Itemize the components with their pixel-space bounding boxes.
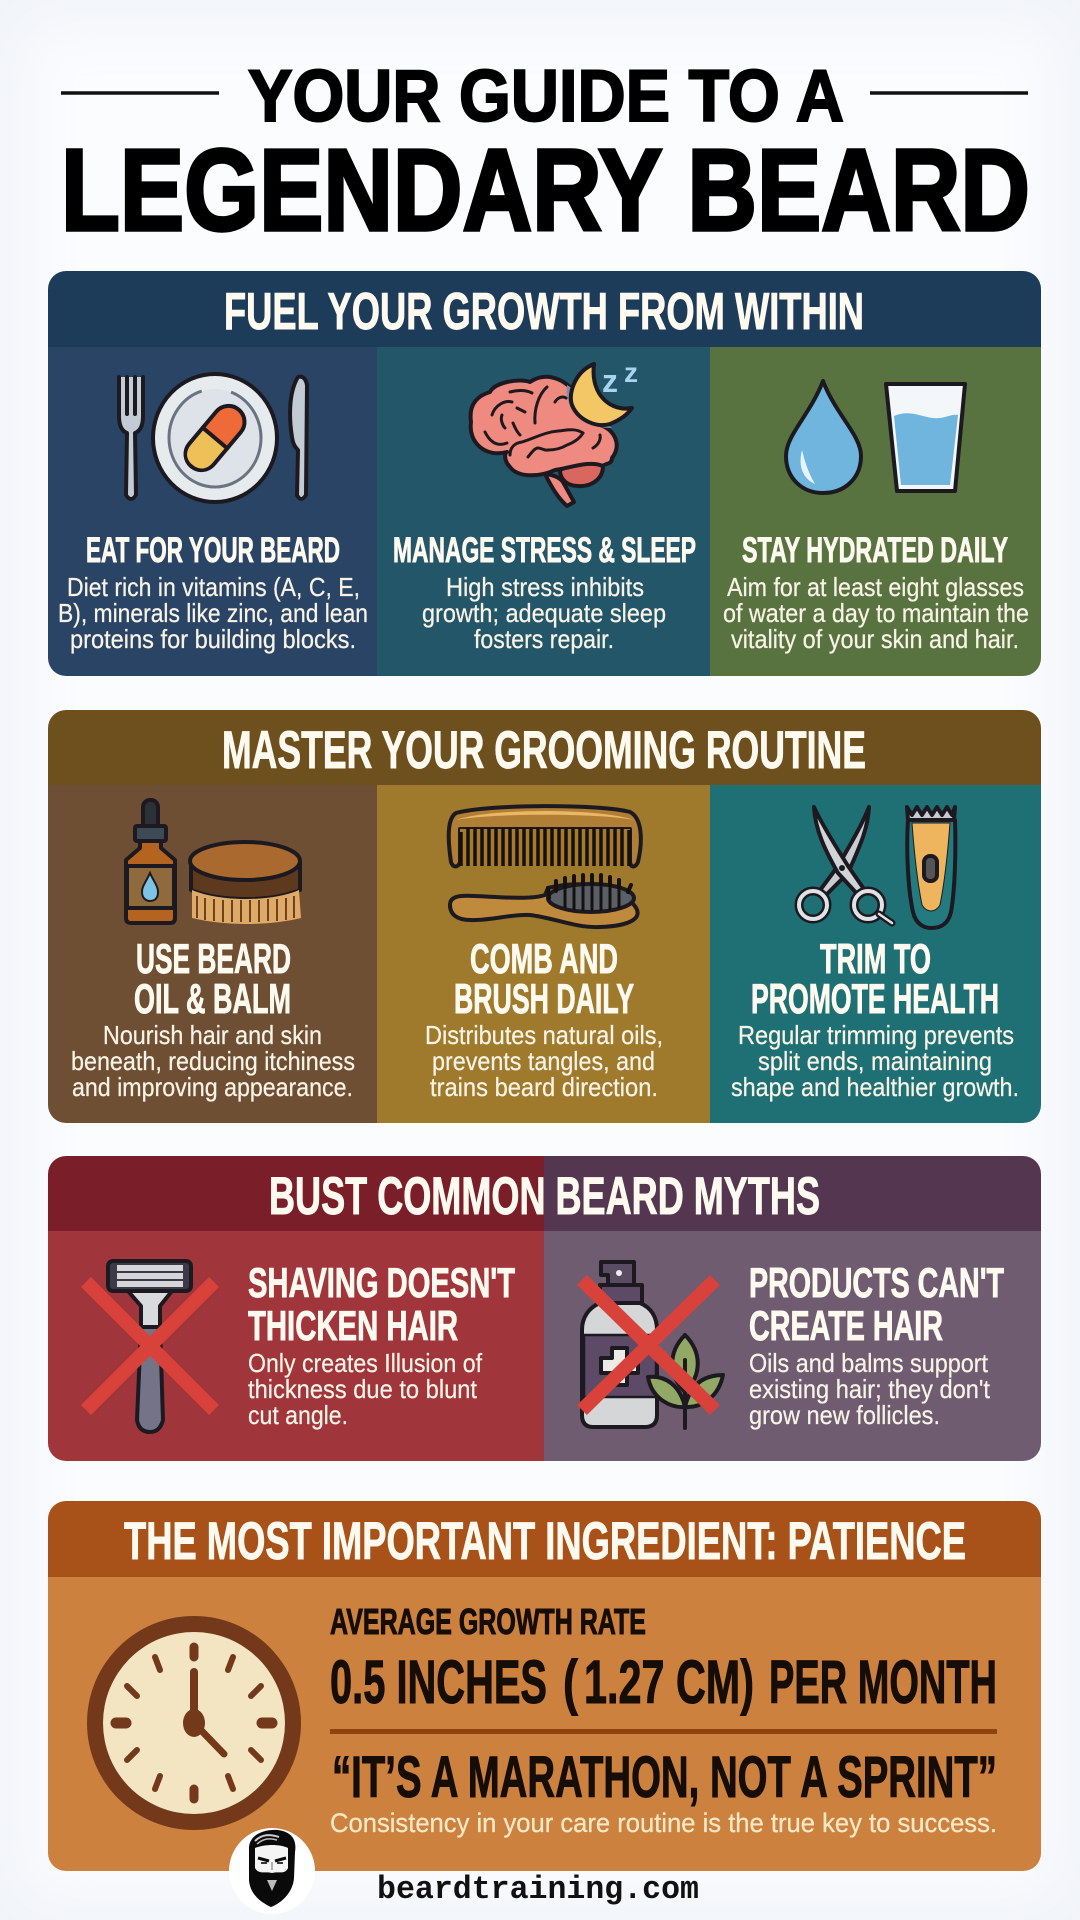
text: shaving myth: THICKEN HAIR	[248, 1302, 458, 1349]
text: growth rate value: 0.5 INCHES	[330, 1648, 547, 1716]
text: stay hydrated: vitality of your skin and hair.	[731, 624, 1019, 654]
text: stay hydrated	[723, 531, 1029, 654]
icon: sleep z letters: z	[602, 363, 618, 399]
text: eat for your beard: Diet rich in vitamins (A, C, E,	[67, 572, 360, 602]
text: trim to promote health: Regular trimming prevents	[738, 1020, 1014, 1050]
text: products myth: existing hair; they don't	[749, 1374, 991, 1404]
text: shaving myth: thickness due to blunt	[248, 1374, 478, 1404]
text: use beard oil and balm: and improving appearance.	[72, 1072, 353, 1102]
icon: plate with pill, fork and knife	[119, 374, 307, 502]
title	[61, 56, 1030, 255]
text: comb and brush daily: BRUSH DAILY	[454, 975, 634, 1022]
title: YOUR GUIDE TO A	[248, 56, 844, 137]
text: manage stress and sleep: MANAGE STRESS & SLEEP	[393, 531, 696, 570]
text: shaving myth: Only creates Illusion of	[248, 1348, 483, 1378]
text: website: beardtraining.com	[377, 1871, 699, 1908]
icon: bearded man logo	[229, 1828, 315, 1914]
panel: beard myths	[48, 1156, 1041, 1461]
text: eat for your beard: B), minerals like zinc, and lean	[58, 598, 368, 628]
text: trim to promote health: TRIM TO	[820, 935, 931, 982]
text: comb and brush daily: prevents tangles, and	[432, 1046, 655, 1076]
text: comb and brush daily: trains beard direction.	[430, 1072, 658, 1102]
text: comb and brush daily: COMB AND	[470, 935, 618, 982]
icon: comb and hair brush	[449, 806, 641, 927]
text: growth rate value	[331, 1658, 995, 1716]
text: products myth	[749, 1259, 1004, 1430]
text: use beard oil and balm: Nourish hair and skin	[103, 1020, 322, 1050]
icon: brain with moon	[471, 357, 638, 506]
text: use beard oil and balm	[71, 935, 355, 1102]
text: average growth rate: AVERAGE GROWTH RATE	[330, 1601, 646, 1642]
icon: sleep z letters	[603, 368, 637, 392]
text: eat for your beard	[58, 531, 368, 654]
panel: patience	[48, 1501, 1041, 1871]
text: trim to promote health	[731, 935, 1019, 1102]
text: growth rate value: 1.27 CM)	[584, 1648, 754, 1716]
text: use beard oil and balm: beneath, reducing itchiness	[71, 1046, 355, 1076]
icon: sleep z letters: z	[624, 357, 638, 388]
text: trim to promote health: shape and healthier growth.	[731, 1072, 1019, 1102]
text: eat for your beard: proteins for building blocks.	[70, 624, 356, 654]
text: comb and brush daily: Distributes natural oils,	[425, 1020, 663, 1050]
text: comb and brush daily	[425, 935, 663, 1102]
heading: beard myths: BUST COMMON BEARD MYTHS	[269, 1167, 820, 1226]
icon: water drop and glass	[786, 381, 965, 493]
text: shaving myth	[248, 1259, 515, 1430]
text: consistency note: Consistency in your care routine is the true key to success.	[330, 1808, 997, 1838]
text: manage stress and sleep: fosters repair.	[474, 624, 614, 654]
icon: clock	[87, 1616, 301, 1830]
panel: grooming routine	[48, 710, 1041, 1123]
text: stay hydrated: of water a day to maintain the	[723, 598, 1029, 628]
text: stay hydrated: Aim for at least eight glasses	[727, 572, 1024, 602]
text: shaving myth: cut angle.	[248, 1400, 348, 1430]
icon: crossed razor	[86, 1261, 214, 1432]
text: shaving myth: SHAVING DOESN'T	[248, 1259, 515, 1306]
icon: crossed spray bottle and leaves	[582, 1262, 723, 1428]
text: growth rate value: (	[563, 1648, 578, 1716]
icon: oil bottle and beard brush	[126, 800, 301, 924]
panel: fuel your growth	[48, 271, 1041, 676]
icon: scissors and clipper	[799, 807, 955, 928]
text: products myth: Oils and balms support	[749, 1348, 989, 1378]
text: manage stress and sleep: growth; adequate sleep	[422, 598, 666, 628]
text: manage stress and sleep: High stress inhibits	[446, 572, 644, 602]
text: products myth: grow new follicles.	[749, 1400, 940, 1430]
text: manage stress and sleep	[393, 531, 696, 654]
text: use beard oil and balm: USE BEARD	[136, 935, 291, 982]
text: trim to promote health: split ends, maintaining	[758, 1046, 992, 1076]
text: eat for your beard: EAT FOR YOUR BEARD	[86, 531, 340, 570]
text: use beard oil and balm: OIL & BALM	[134, 975, 291, 1022]
text: products myth: CREATE HAIR	[749, 1302, 943, 1349]
